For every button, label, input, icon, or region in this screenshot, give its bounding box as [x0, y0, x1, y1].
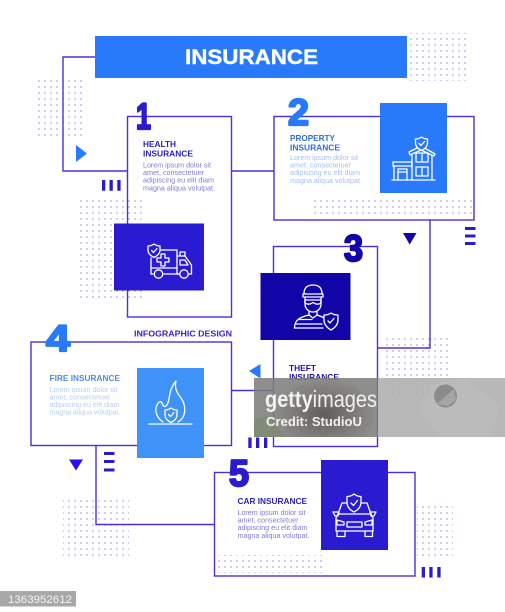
card 2 text: INSURANCE	[290, 142, 340, 152]
card 3 text: INSURANCE	[289, 372, 339, 382]
card 5 text: adipiscing eu elit diam	[238, 523, 308, 532]
dot pattern: bottom left	[63, 498, 129, 558]
card 4 text	[50, 373, 120, 416]
arrow: right triangle	[76, 145, 87, 162]
card 4 text: FIRE INSURANCE	[50, 373, 120, 383]
watermark credit: Credit: StudioU	[266, 414, 362, 429]
card 1 text: HEALTH	[143, 139, 176, 149]
number 4: 4	[46, 318, 70, 359]
decorative bars: card 4	[104, 452, 114, 472]
card 1 text	[143, 139, 215, 192]
watermark logo text: gettyimages	[265, 386, 377, 412]
icon: house with shield	[380, 103, 447, 193]
number 3: 3	[344, 228, 363, 269]
image id tag	[0, 591, 76, 606]
number 5: 5	[229, 453, 249, 494]
card 5 text: CAR INSURANCE	[238, 496, 307, 506]
dot pattern: inside card 5	[216, 555, 324, 573]
dot pattern: inside card 2	[312, 198, 474, 216]
decorative bars: card 3	[248, 438, 267, 448]
card 5 text	[238, 496, 310, 540]
card 2 text: magna aliqua volutpat.	[290, 176, 362, 185]
card 2 text: amet, consectetuer	[290, 161, 352, 170]
dot pattern: bottom right	[417, 502, 453, 556]
panel: card 4 fire insurance	[31, 318, 232, 458]
card 5 text: magna aliqua volutpat.	[238, 531, 310, 540]
card 1 text: INSURANCE	[143, 149, 193, 159]
card 1 text: Lorem ipsum dolor sit	[143, 160, 211, 170]
card 3 text: amet, consectetuer	[289, 390, 351, 400]
icon: flame with shield	[137, 368, 204, 458]
card 4 text: amet, consectetuer	[50, 392, 111, 401]
decorative bars: card 2	[465, 227, 476, 245]
subtitle: infographic design: INFOGRAPHIC DESIGN	[134, 328, 232, 338]
title banner: INSURANCE	[185, 46, 318, 69]
card 3 text: Lorem ipsum dolor sit	[289, 383, 357, 392]
card 2 text	[290, 133, 362, 185]
card 2 text: PROPERTY	[290, 133, 335, 143]
card 4 text: magna aliqua volutpat.	[50, 408, 120, 416]
dot pattern: right middle	[384, 336, 450, 396]
icon: ambulance with shield	[114, 224, 204, 290]
arrow: down triangle after card 2	[403, 233, 416, 244]
card 3 text	[289, 363, 359, 414]
card 2 text: Lorem ipsum dolor sit	[290, 153, 358, 162]
dot pattern: top left	[36, 79, 84, 139]
card 1 text: adipiscing eu elit diam	[143, 176, 214, 184]
card 4 text: adipiscing eu elit diam	[50, 400, 120, 409]
connector lines	[63, 57, 430, 524]
card 2 text: adipiscing eu elit diam	[290, 168, 360, 177]
dot pattern: beside card 1	[78, 198, 144, 302]
arrow: left triangle before card 4	[249, 364, 260, 378]
panel: card 1 health insurance	[114, 96, 232, 317]
title banner	[95, 36, 407, 78]
card 3 text: magna aliqua volutpat.	[289, 406, 359, 414]
decorative bars: card 5	[422, 567, 441, 578]
card 5 text: amet, consectetuer	[238, 516, 299, 524]
icon: thief with shield	[260, 273, 350, 340]
card 3 text: adipiscing eu elit diam	[289, 398, 357, 407]
image id tag: 1363952612	[8, 594, 72, 606]
dot pattern: top right	[408, 33, 468, 81]
decorative bars: card 1	[102, 180, 121, 191]
number 2: 2	[288, 92, 309, 133]
card 4 text: Lorem ipsum dolor sit	[50, 385, 118, 394]
panel: card 5 car insurance	[214, 453, 415, 576]
icon: car with shield	[321, 460, 388, 550]
card 5 text: Lorem ipsum dolor sit	[238, 508, 306, 517]
panel: card 2 property insurance	[274, 92, 474, 220]
card 1 text: amet, consectetuer	[143, 168, 205, 177]
watermark band	[254, 378, 505, 437]
arrow: down triangle after card 4	[69, 460, 83, 470]
card 3 text: THEFT	[289, 363, 317, 373]
card 1 text: magna aliqua volutpat.	[143, 183, 215, 192]
number 1: 1	[136, 96, 151, 137]
panel: card 3 theft insurance	[260, 228, 378, 446]
